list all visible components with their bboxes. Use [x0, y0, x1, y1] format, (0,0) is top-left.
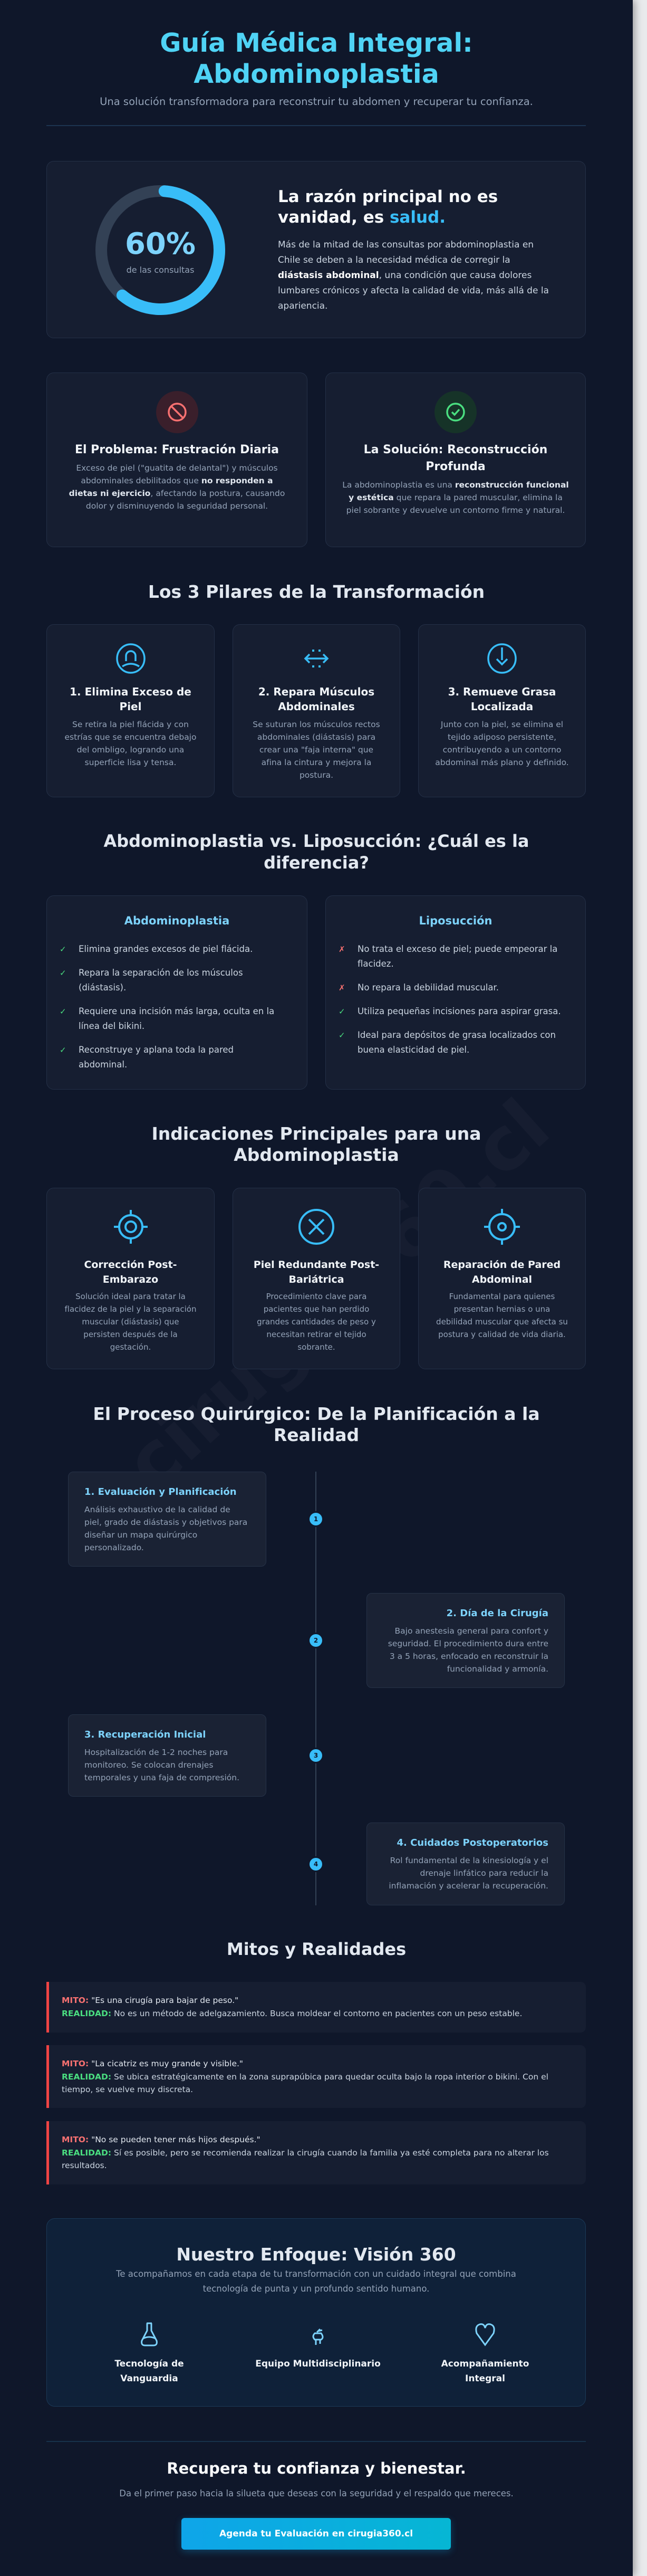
- heading: cta: Recupera tu confianza y bienestar.: [167, 2459, 466, 2477]
- panel: abdominoplastia list: [46, 895, 307, 1090]
- panel: indicación 1: Solución ideal para tratar la flacidez de la piel y la separación muscular (diástasis) que persisten después de la gestación.: [65, 1292, 196, 1352]
- step marker 1: [310, 1513, 322, 1525]
- heading: comparación: [103, 831, 529, 873]
- donut chart 60%: 60%: [125, 227, 196, 261]
- panel: liposucción list: ✗: [339, 983, 345, 993]
- step marker 2: 2: [314, 1637, 318, 1644]
- icon: prohibited: [156, 391, 198, 433]
- panel: abdominoplastia list: Abdominoplastia: [124, 914, 229, 927]
- panel: liposucción list: Ideal para depósitos de grasa localizados con buena elasticidad de piel.: [358, 1030, 556, 1055]
- feature: acompañamiento: Acompañamiento: [441, 2359, 529, 2369]
- panel: statistic 60%: [46, 161, 586, 338]
- text: explanation: Más de la mitad de las consultas por abdominoplastia en Chile se deben a la necesidad médica de corregir la diástasis abdominal, una condición que causa dolores lumbares crónicos y afecta la calidad de vida, más allá de la apariencia.: [278, 240, 549, 311]
- timeline step 4: Rol fundamental de la kinesiología y el drenaje linfático para reducir la inflamación y acelerar la recuperación.: [389, 1856, 548, 1891]
- subtitle: Una solución transformadora para reconstruir tu abdomen y recuperar tu confianza.: [100, 96, 533, 108]
- timeline step 2: Bajo anestesia general para confort y seguridad. El procedimiento dura entre 3 a 5 horas, enfocado en reconstruir la funcionalidad y armonía.: [388, 1626, 548, 1674]
- text: visión: Te acompañamos en cada etapa de tu transformación con un cuidado integral que combina tecnología de punta y un profundo sentido humano.: [116, 2269, 516, 2294]
- feature: equipo: [255, 2329, 381, 2369]
- panel: pilar 2: Se suturan los músculos rectos abdominales (diástasis) para crear una "faja interna" que afina la cintura y mejora la postura.: [253, 720, 380, 780]
- panel: abdominoplastia list: Reconstruye y aplana toda la pared abdominal.: [79, 1045, 234, 1070]
- myth 2: MITO: "La cicatriz es muy grande y visible.": [62, 2059, 243, 2068]
- myth 2: REALIDAD: Se ubica estratégicamente en la zona suprapúbica para quedar oculta bajo la ropa interior o bikini. Con el tiempo, se vuelve muy discreta.: [62, 2072, 548, 2094]
- heading: visión: Nuestro Enfoque: Visión 360: [176, 2244, 456, 2265]
- panel: abdominoplastia list: ✓: [60, 1045, 66, 1055]
- panel: solution: La abdominoplastia es una reconstrucción funcional y estética que repara la pared muscular, elimina la piel sobrante y devuelve un contorno firme y natural.: [342, 480, 569, 515]
- text: cta: Da el primer paso hacia la silueta que deseas con la seguridad y el respaldo que mereces.: [119, 2488, 514, 2498]
- donut chart 60%: de las consultas: [127, 265, 194, 275]
- myth 3: [46, 2121, 586, 2184]
- step marker 3: 3: [314, 1752, 318, 1759]
- myth 3: MITO: "No se pueden tener más hijos después.": [62, 2135, 260, 2144]
- panel: abdominoplastia list: ✓: [60, 968, 66, 978]
- myth 1: [46, 1982, 586, 2033]
- panel: liposucción list: Liposucción: [419, 914, 492, 927]
- myth 1: REALIDAD: No es un método de adelgazamiento. Busca moldear el contorno en pacientes con un peso estable.: [62, 2008, 522, 2018]
- step marker 4: [310, 1858, 322, 1871]
- icon: target: [114, 1210, 148, 1244]
- timeline: [315, 1472, 316, 1905]
- donut chart 60%: [95, 185, 225, 315]
- title: Guía Médica Integral:: [160, 28, 473, 58]
- icon: skin: [116, 643, 146, 674]
- watermark: cirugia360.cl: [109, 1083, 566, 1507]
- panel: visión 360: [46, 2218, 586, 2407]
- timeline step 2: [366, 1593, 565, 1688]
- timeline step 1: [68, 1472, 266, 1567]
- myth 3: REALIDAD: Sí es posible, pero se recomienda realizar la cirugía cuando la familia ya esté completa para no alterar los resultados.: [62, 2148, 549, 2170]
- panel: pilar 2: [233, 624, 400, 797]
- feature: tecnología: [114, 2323, 184, 2384]
- panel: liposucción list: ✗: [339, 944, 345, 954]
- panel: indicación 1: Corrección Post-Embarazo: [84, 1259, 177, 1285]
- panel: liposucción list: Utiliza pequeñas incisiones para aspirar grasa.: [358, 1006, 561, 1016]
- panel: pilar 2: 2. Repara Músculos Abdominales: [258, 685, 374, 713]
- title: Abdominoplastia: [194, 59, 439, 89]
- panel: indicación 2: Piel Redundante Post-Bariátrica: [254, 1259, 379, 1285]
- feature: equipo: Equipo Multidisciplinario: [255, 2359, 381, 2369]
- button: agenda: [181, 2518, 451, 2550]
- feature: acompañamiento: Integral: [465, 2373, 505, 2384]
- timeline step 2: 2. Día de la Cirugía: [447, 1608, 548, 1619]
- title: [160, 28, 473, 89]
- panel: abdominoplastia list: Repara la separación de los músculos (diástasis).: [79, 968, 243, 993]
- feature: tecnología: Vanguardia: [120, 2373, 178, 2384]
- heading: comparación: Abdominoplastia vs. Liposucción: ¿Cuál es la: [103, 831, 529, 851]
- panel: pilar 1: Se retira la piel flácida y con estrías que se encuentra debajo del ombligo, logrando una superficie lisa y tensa.: [64, 720, 196, 767]
- panel: problem: [46, 373, 307, 547]
- panel: solution: La Solución: Reconstrucción Profunda: [364, 443, 547, 473]
- panel: indicación 3: Fundamental para quienes presentan hernias o una debilidad muscular que afecta su postura y calidad de vida diaria.: [436, 1292, 568, 1339]
- panel: pilar 1: [46, 624, 215, 797]
- panel: indicación 3: [418, 1188, 586, 1369]
- heading: razón principal: La razón principal no es vanidad, es salud.: [278, 187, 498, 227]
- myth 2: [46, 2045, 586, 2108]
- heading: indicaciones: [151, 1123, 481, 1165]
- icon: x circle: [298, 1209, 334, 1245]
- panel: liposucción list: ✓: [339, 1007, 345, 1016]
- panel: pilar 3: 3. Remueve Grasa Localizada: [448, 685, 556, 713]
- step marker 2: [310, 1634, 322, 1647]
- heading: indicaciones: Abdominoplastia: [234, 1144, 399, 1165]
- icon: target small: [484, 1209, 520, 1245]
- panel: abdominoplastia list: ✓: [60, 1007, 66, 1016]
- icon: down arrow: [487, 643, 517, 674]
- panel: indicación 2: Procedimiento clave para pacientes que han perdido grandes cantidades de peso y necesitan retirar el tejido sobrante.: [257, 1292, 376, 1352]
- button: agenda: Agenda tu Evaluación en cirugia360.cl: [219, 2529, 413, 2539]
- panel: problem: Exceso de piel ("guatita de delantal") y músculos abdominales debilitados que no responden a dietas ni ejercicio, afectando la postura, causando dolor y disminuyendo la seguridad personal.: [69, 463, 285, 511]
- panel: liposucción list: ✓: [339, 1031, 345, 1040]
- step marker 1: 1: [314, 1515, 318, 1523]
- panel: indicación 3: Reparación de Pared Abdominal: [443, 1259, 561, 1285]
- step marker 3: [310, 1749, 322, 1762]
- heading: comparación: diferencia?: [264, 853, 369, 873]
- step marker 4: 4: [314, 1861, 318, 1868]
- timeline step 3: [68, 1714, 266, 1797]
- timeline step 3: 3. Recuperación Inicial: [84, 1729, 206, 1740]
- timeline step 1: Análisis exhaustivo de la calidad de piel, grado de diástasis y objetivos para diseñar un mapa quirúrgico personalizado.: [84, 1505, 247, 1552]
- myth 1: MITO: "Es una cirugía para bajar de peso.": [62, 1996, 238, 2005]
- panel: pilar 3: Junto con la piel, se elimina el tejido adiposo persistente, contribuyendo a un contorno abdominal más plano y definido.: [435, 720, 569, 767]
- panel: liposucción list: No trata el exceso de piel; puede empeorar la flacidez.: [358, 944, 557, 969]
- panel: indicación 2: [233, 1188, 400, 1369]
- feature: acompañamiento: [441, 2323, 529, 2384]
- timeline step 4: [366, 1823, 565, 1905]
- panel: indicación 1: [46, 1188, 215, 1369]
- panel: abdominoplastia list: ✓: [60, 944, 66, 954]
- panel: abdominoplastia list: Elimina grandes excesos de piel flácida.: [79, 944, 253, 954]
- timeline step 4: 4. Cuidados Postoperatorios: [397, 1837, 548, 1848]
- panel: pilar 3: [418, 624, 586, 797]
- heading: pilares: Los 3 Pilares de la Transformación: [148, 581, 485, 602]
- icon: arrows: [304, 650, 329, 667]
- heading: proceso: El Proceso Quirúrgico: De la Planificación a la: [93, 1404, 540, 1424]
- panel: liposucción list: No repara la debilidad muscular.: [358, 982, 499, 993]
- feature: tecnología: Tecnología de: [114, 2359, 184, 2369]
- heading: mitos: Mitos y Realidades: [227, 1939, 406, 1959]
- timeline step 3: Hospitalización de 1-2 noches para monitoreo. Se colocan drenajes temporales y una faja de compresión.: [84, 1748, 239, 1782]
- panel: solution: [325, 373, 586, 547]
- heading: indicaciones: Indicaciones Principales para una: [151, 1123, 481, 1144]
- panel: pilar 1: 1. Elimina Exceso de Piel: [70, 685, 191, 713]
- heading: proceso: Realidad: [274, 1425, 359, 1445]
- timeline step 1: 1. Evaluación y Planificación: [84, 1486, 237, 1497]
- icon: check: [434, 391, 477, 433]
- heading: proceso: [93, 1404, 540, 1445]
- panel: liposucción list: [325, 895, 586, 1090]
- panel: abdominoplastia list: Requiere una incisión más larga, oculta en la línea del bikini.: [79, 1006, 274, 1031]
- panel: problem: El Problema: Frustración Diaria: [75, 443, 279, 456]
